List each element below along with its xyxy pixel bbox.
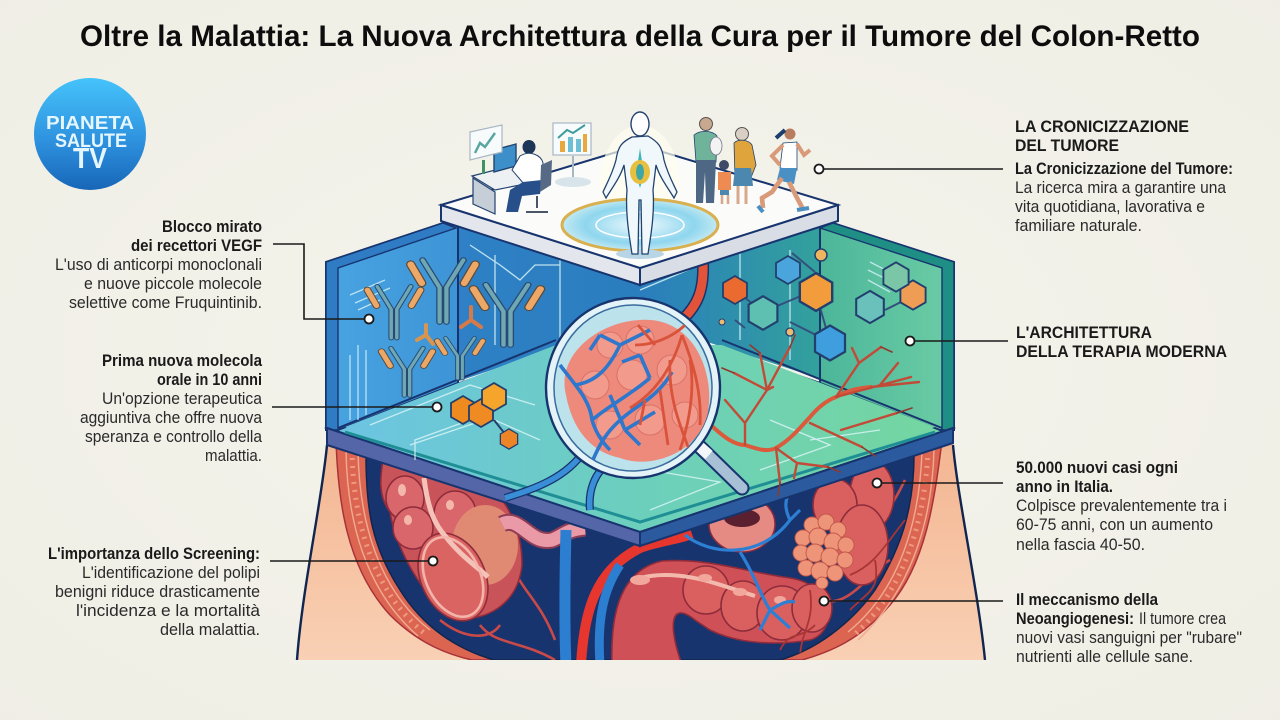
platform top	[441, 145, 838, 268]
text: 50.000 casi: 60-75 anni, con un aumento	[1016, 515, 1213, 534]
text: Cronicizzazione	[1015, 117, 1233, 235]
text: Neoangiogenesi: Il meccanismo della	[1016, 590, 1158, 609]
text: 50.000 casi: 50.000 nuovi casi ogni	[1016, 458, 1178, 477]
text: Neoangiogenesi: Neoangiogenesi:	[1016, 609, 1134, 628]
runner	[758, 128, 810, 212]
back wall centre	[456, 170, 830, 382]
text: Blocco mirato: e nuove piccole molecole	[84, 274, 262, 293]
text: Screening: benigni riduce drasticamente	[55, 582, 260, 601]
text: Architettura: DELLA TERAPIA MODERNA	[1016, 342, 1227, 361]
polyp frame	[422, 536, 484, 618]
text: Blocco mirato: Blocco mirato	[162, 217, 262, 236]
logo: Pianeta Salute TV: SALUTE	[55, 131, 127, 152]
family	[694, 118, 756, 204]
text: Cronicizzazione: vita quotidiana, lavorativa e	[1015, 197, 1205, 216]
intestine loop centre	[708, 505, 776, 553]
colon ascending	[380, 464, 523, 622]
human figure	[603, 112, 677, 259]
logo: Pianeta Salute TV	[34, 78, 146, 190]
chart board	[553, 123, 591, 187]
text: Neoangiogenesi: Il tumore crea	[1139, 609, 1226, 628]
text: Screening	[48, 544, 261, 639]
text: Architettura	[1016, 323, 1227, 361]
text: Cronicizzazione: DEL TUMORE	[1015, 136, 1119, 155]
desk worker	[470, 125, 552, 214]
leader: casi	[872, 478, 1003, 488]
leader: screening	[270, 556, 438, 566]
text: Neoangiogenesi: nuovi vasi sanguigni per "rubare"	[1016, 628, 1242, 647]
blue branches	[685, 480, 800, 630]
antibodies	[367, 260, 540, 396]
text: Cronicizzazione: LA CRONICIZZAZIONE	[1015, 117, 1189, 136]
thin vessels	[440, 480, 905, 660]
slab	[327, 428, 640, 546]
text: Blocco mirato: dei recettori VEGF	[131, 236, 262, 255]
orange molecule	[451, 383, 518, 449]
text: Prima nuova molecola: orale in 10 anni	[157, 370, 262, 389]
text: Architettura: L'ARCHITETTURA	[1016, 323, 1152, 342]
platform side faces	[441, 205, 640, 285]
red tube	[682, 262, 703, 320]
circuit lines	[370, 240, 880, 510]
glow behind figure	[600, 125, 680, 245]
right wall	[820, 223, 954, 430]
leader: neoangiogenesi	[820, 596, 1003, 606]
illustration: abdomen anatomy	[290, 440, 990, 665]
text: 50.000 casi: nella fascia 40-50.	[1016, 535, 1145, 554]
title: Oltre la Malattia: La Nuova Architettura della Cura per il Tumore del Colon-Retto	[80, 20, 1200, 53]
text: Cronicizzazione: La ricerca mira a garantire una	[1015, 178, 1226, 197]
leader: nuova molecola	[272, 402, 442, 412]
text: Prima nuova molecola: speranza e controllo della	[85, 427, 262, 446]
text: Prima nuova molecola: Prima nuova molecola	[102, 351, 262, 370]
text: Screening: della malattia.	[160, 620, 260, 639]
healing ring	[562, 199, 718, 251]
text: Cronicizzazione: familiare naturale.	[1015, 216, 1142, 235]
abdomen skin	[297, 440, 985, 660]
magnifier lens	[546, 298, 720, 478]
logo: Pianeta Salute TV: PIANETA	[46, 113, 134, 133]
leader: cronicizzazione	[814, 164, 1003, 174]
text: Blocco mirato: selettive come Fruquintinib.	[69, 293, 262, 312]
floor seams	[338, 340, 942, 428]
colon descending	[612, 461, 894, 665]
text: Prima nuova molecola	[80, 351, 262, 465]
muscle wall	[336, 440, 942, 660]
floor	[327, 322, 953, 532]
magnifier handle	[700, 447, 742, 488]
text: Blocco mirato	[55, 217, 262, 312]
text: Neoangiogenesi	[1016, 590, 1242, 666]
molecule right	[719, 249, 926, 360]
text: 50.000 casi: Colpisce prevalentemente tra i	[1016, 496, 1227, 515]
abdominal cavity	[366, 455, 914, 660]
text: Screening: L'identificazione del polipi	[82, 563, 260, 582]
tumour mass	[793, 514, 854, 589]
great vessels	[565, 530, 566, 665]
small intestine	[502, 522, 585, 541]
text: Blocco mirato: L'uso di anticorpi monoclonali	[55, 255, 262, 274]
text: Prima nuova molecola: malattia.	[205, 446, 262, 465]
illustration: 3D therapy chamber	[326, 112, 954, 546]
red branches	[780, 520, 905, 660]
leader: VEGF	[273, 244, 374, 324]
text: Prima nuova molecola: aggiuntiva che offre nuova	[80, 408, 262, 427]
logo: Pianeta Salute TV: TV	[73, 143, 108, 175]
text: Screening: l'incidenza e la mortalità	[76, 601, 261, 620]
text: Neoangiogenesi: nutrienti alle cellule sane.	[1016, 647, 1193, 666]
text: Screening: L'importanza dello Screening:	[48, 544, 260, 563]
text: Cronicizzazione: La Cronicizzazione del Tumore:	[1015, 159, 1233, 178]
text: Prima nuova molecola: Un'opzione terapeutica	[102, 389, 262, 408]
blue veins on floor	[505, 450, 610, 510]
angiogenesis vessels	[713, 335, 919, 496]
text: 50.000 casi	[1016, 458, 1227, 554]
text: 50.000 casi: anno in Italia.	[1016, 477, 1113, 496]
left wall	[326, 223, 458, 430]
leader: architettura	[906, 336, 1008, 346]
